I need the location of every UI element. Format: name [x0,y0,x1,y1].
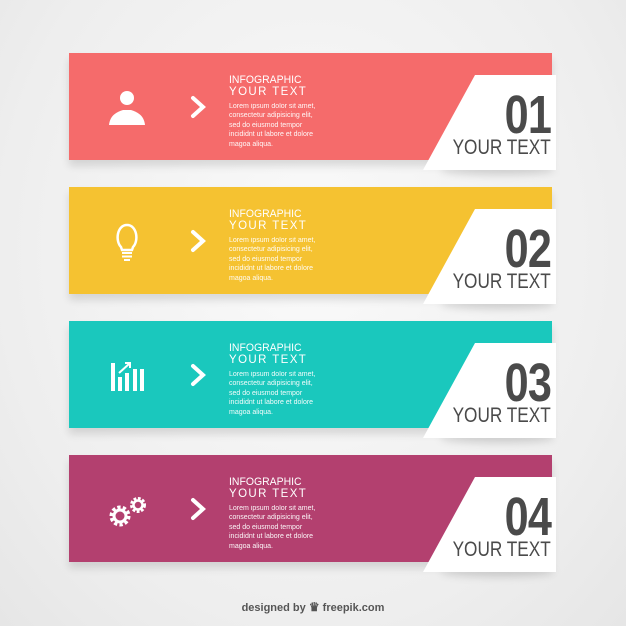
icon: person [109,91,145,125]
panel: row 03 [66,321,556,446]
icon: gears [110,497,146,526]
icon: bulb [116,224,138,261]
text block: YOUR TEXT [229,220,307,232]
text block: incididnt ut labore et dolore [229,533,313,540]
band: red [69,53,552,160]
text block: consectetur adipisicing elit, [229,112,313,119]
text block [229,208,315,282]
card: 04: YOUR TEXT [453,538,551,561]
text block: consectetur adipisicing elit, [229,380,313,387]
text block: incididnt ut labore et dolore [229,399,313,406]
text block: Lorem ipsum dolor sit amet, [229,505,315,512]
text block: magoa aliqua. [229,275,273,282]
text block [229,342,315,416]
text block: magoa aliqua. [229,543,273,550]
footer credit: designed by ♛ freepik.com [242,600,384,614]
text block: Lorem ipsum dolor sit amet, [229,237,315,244]
text block: Lorem ipsum dolor sit amet, [229,371,315,378]
text block: YOUR TEXT [229,86,307,98]
card: 01 [423,75,556,170]
text block: incididnt ut labore et dolore [229,131,313,138]
text block: sed do eiusmod tempor [229,256,302,263]
card: 04 [423,477,556,572]
text block [229,74,315,148]
text block: YOUR TEXT [229,354,307,366]
text block: magoa aliqua. [229,409,273,416]
card: 02: YOUR TEXT [453,270,551,293]
card: 03 [423,343,556,438]
icon: chart [111,362,144,391]
text block: Lorem ipsum dolor sit amet, [229,103,315,110]
text block: magoa aliqua. [229,141,273,148]
band: yellow [69,187,552,294]
card: 03: YOUR TEXT [453,404,551,427]
panel: row 02 [66,187,556,312]
text block: INFOGRAPHIC [229,208,302,220]
text block: incididnt ut labore et dolore [229,265,313,272]
text block: INFOGRAPHIC [229,476,302,488]
arrow [190,96,206,118]
card: 04: 04 [505,487,551,547]
text block: YOUR TEXT [229,488,307,500]
text block [229,476,315,550]
text block: sed do eiusmod tempor [229,524,302,531]
text block: sed do eiusmod tempor [229,122,302,129]
arrow [190,364,206,386]
card: 03: 03 [505,353,551,413]
card: 02: 02 [505,219,551,279]
card: 02 [423,209,556,304]
text block: consectetur adipisicing elit, [229,246,313,253]
arrow [190,498,206,520]
band: purple [69,455,552,562]
text block: INFOGRAPHIC [229,342,302,354]
panel: row 01 [66,53,556,178]
card: 01: YOUR TEXT [453,136,551,159]
arrow [190,230,206,252]
band: teal [69,321,552,428]
text block: INFOGRAPHIC [229,74,302,86]
card: 01: 01 [505,85,551,145]
text block: consectetur adipisicing elit, [229,514,313,521]
text block: sed do eiusmod tempor [229,390,302,397]
panel: row 04 [66,455,556,580]
